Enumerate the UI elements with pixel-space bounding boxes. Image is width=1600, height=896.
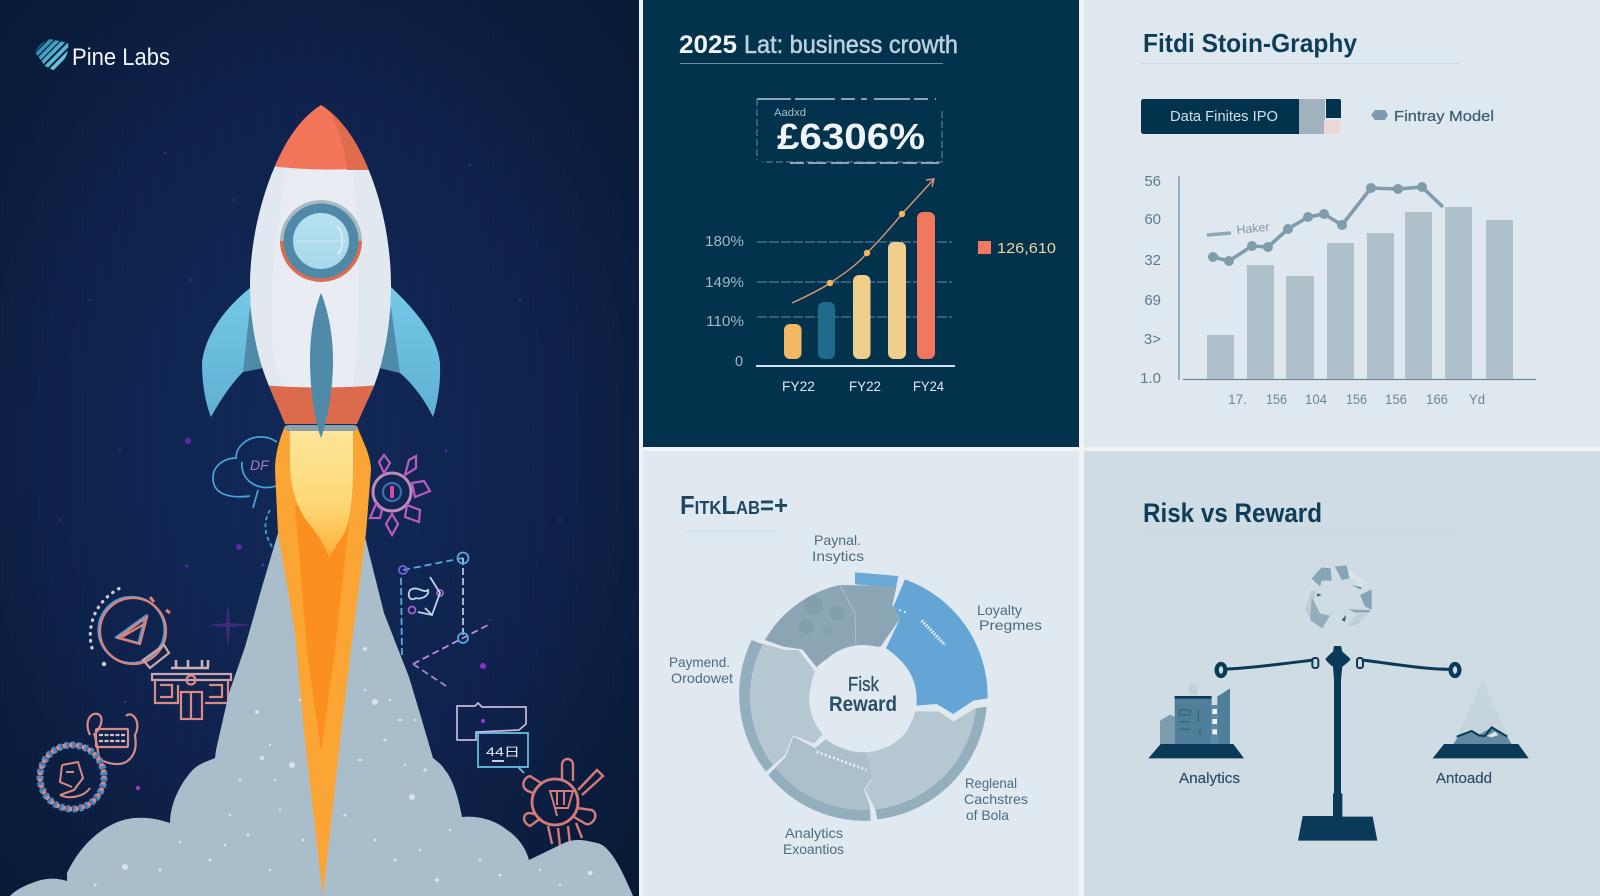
bar chart — [784, 212, 935, 359]
callout: headline figure — [757, 99, 942, 163]
donut center label: Reward — [829, 693, 897, 716]
right platform — [1433, 744, 1529, 758]
donut chart — [739, 572, 988, 821]
segment labels: Exoantios — [783, 841, 844, 857]
scale beam — [1217, 646, 1459, 680]
y axis labels — [705, 234, 744, 370]
trend arrow — [792, 179, 934, 303]
series label — [1207, 220, 1270, 237]
icon: mountain — [1453, 681, 1512, 744]
segment labels: Orodowet — [671, 670, 733, 686]
segment labels: Insytics — [812, 548, 864, 564]
button: Data Finites IPO: Data Finites IPO — [1170, 108, 1278, 125]
y axis labels: 56 — [1144, 173, 1161, 190]
panel: business growth — [643, 0, 1079, 447]
icon: fragmented globe — [1305, 565, 1372, 628]
rocket — [202, 100, 440, 438]
background sparkles — [124, 438, 486, 790]
icon: cloud network — [213, 437, 277, 548]
callout: headline figure: £6306% — [777, 116, 925, 157]
label: Antoadd: Antoadd — [1436, 770, 1492, 787]
segment labels: Cachstres — [964, 791, 1028, 807]
y axis labels: 3> — [1144, 331, 1161, 348]
icon: striped shield — [35, 39, 68, 70]
segment: left — [739, 640, 823, 772]
segment: bottom left — [768, 737, 872, 821]
heading: Lat: business crowth — [744, 31, 958, 59]
icon: dashed network diagram — [399, 552, 488, 686]
bar chart — [1207, 207, 1513, 379]
y axis labels — [1140, 173, 1161, 387]
segment labels: of Bola — [966, 807, 1009, 823]
x axis labels: Yd — [1469, 391, 1485, 407]
series label: Haker — [1236, 220, 1270, 237]
x axis labels: 166 — [1426, 391, 1448, 407]
y axis labels: 180% — [705, 234, 744, 250]
y axis labels: 60 — [1144, 211, 1161, 228]
segment: top — [765, 585, 900, 667]
panel: rocket launch — [0, 0, 639, 896]
legend: 126,610 — [997, 240, 1056, 257]
callout: headline figure: Aadxd — [774, 107, 806, 119]
icon: compass circle — [90, 588, 170, 668]
segment labels: Pregmes — [979, 617, 1042, 633]
segment labels: Reglenal — [965, 775, 1017, 791]
rocket center fin — [310, 293, 333, 438]
logo: Pine Labs — [35, 39, 170, 70]
legend — [978, 240, 1056, 257]
x axis labels: FY22 — [849, 379, 881, 394]
segment labels: Loyalty — [977, 602, 1022, 618]
donut center label — [829, 674, 897, 716]
donut center — [809, 645, 917, 752]
heading: Fitdi Stoin-Graphy — [1143, 28, 1358, 58]
x axis labels — [782, 379, 944, 394]
balance scale — [1148, 646, 1529, 841]
icon: document folders: 44日 — [486, 745, 520, 759]
y axis labels: 149% — [705, 275, 744, 291]
smoke speckles — [94, 647, 592, 886]
icon: cloud network: DF — [250, 457, 270, 473]
heading: 2025 — [679, 31, 737, 59]
chart axes — [1179, 176, 1536, 380]
icon: building — [1160, 683, 1230, 744]
heading: FitkLab=+ — [680, 490, 788, 520]
rocket collar — [285, 425, 357, 431]
icon: cart gear — [523, 759, 603, 846]
panel: risk vs reward — [1084, 451, 1600, 896]
donut center label: Fisk — [848, 674, 880, 696]
heading: Risk vs Reward — [1143, 498, 1322, 528]
button: Data Finites IPO — [1141, 99, 1341, 134]
panel: donut segments — [643, 451, 1079, 896]
rocket fins — [202, 288, 262, 417]
icon: lyre scroll — [88, 714, 137, 764]
x axis labels — [1228, 391, 1485, 407]
smoke plume — [10, 533, 633, 896]
x axis labels: FY22 — [782, 379, 815, 394]
y axis labels: 69 — [1144, 292, 1161, 309]
line series — [1208, 182, 1443, 266]
rocket body — [250, 105, 391, 424]
scale stand — [1298, 670, 1377, 841]
segment: bottom right — [865, 707, 987, 819]
icon: gear coin — [40, 745, 104, 809]
x axis labels: 156 — [1385, 391, 1407, 407]
x axis labels: FY24 — [913, 379, 944, 394]
x axis labels: 104 — [1305, 391, 1327, 407]
rocket flame — [275, 426, 371, 896]
segment: blue — [886, 579, 988, 714]
icon: document folders — [457, 703, 528, 773]
rocket window — [280, 200, 362, 282]
y axis labels: 1.0 — [1140, 370, 1161, 387]
segment labels: Paymend. — [669, 654, 730, 670]
icon: settings petal gear — [370, 455, 430, 535]
legend: Fintray Model: Fintray Model — [1394, 108, 1494, 125]
x axis labels: 156 — [1346, 391, 1367, 407]
wordmark: Pine Labs — [72, 44, 170, 71]
icon: building people — [152, 660, 231, 719]
segment: top notch — [855, 572, 898, 587]
panel: stock graphy — [1084, 0, 1600, 447]
segment labels: Analytics — [785, 825, 843, 841]
y axis labels: 32 — [1144, 252, 1161, 269]
x axis labels: 156 — [1266, 391, 1287, 407]
y axis labels: 110% — [706, 314, 744, 330]
x axis labels: 17. — [1228, 391, 1247, 407]
label: Analytics: Analytics — [1179, 770, 1240, 787]
y axis labels: 0 — [735, 354, 743, 370]
segment labels — [669, 532, 1042, 857]
segment labels: Paynal. — [814, 532, 861, 548]
left platform — [1148, 744, 1244, 758]
